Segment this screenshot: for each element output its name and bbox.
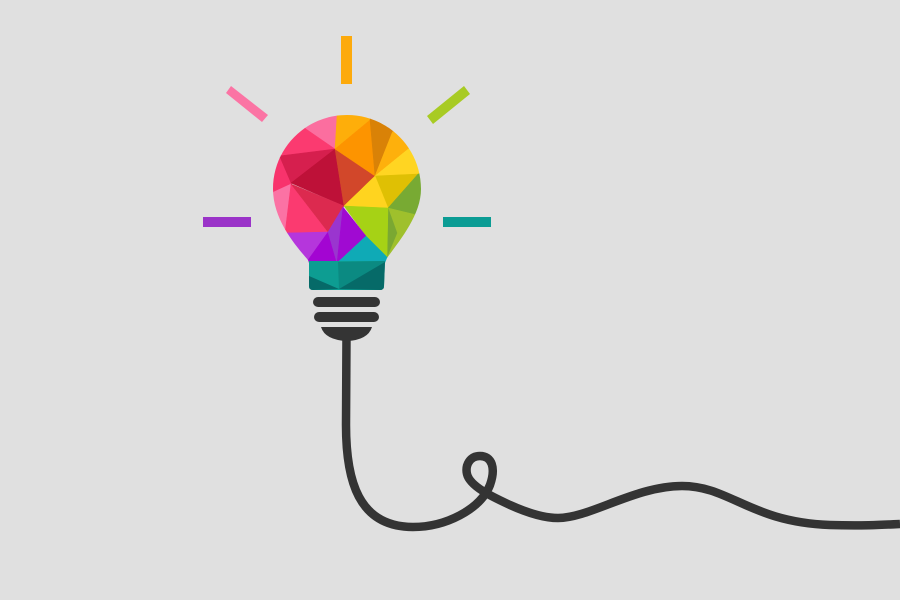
ray: green upper right — [427, 86, 470, 124]
facets: green right side — [344, 174, 421, 258]
bulb base: teal block — [309, 261, 385, 290]
screw thread — [313, 297, 380, 341]
facets: teal collar — [339, 236, 388, 263]
ray: teal right — [443, 217, 491, 227]
facets: orange and yellow top right — [334, 115, 420, 208]
bulb glass: polygon facets — [273, 115, 421, 263]
rays around the bulb — [203, 36, 491, 227]
ray: purple left — [203, 217, 251, 227]
facets: pink and red left side — [273, 116, 374, 234]
illustration: light bulb with cord — [203, 36, 900, 532]
ray: orange top — [341, 36, 352, 84]
power cord — [346, 335, 900, 527]
facets: purple lower left — [287, 207, 366, 263]
ray: pink upper left — [226, 86, 268, 122]
